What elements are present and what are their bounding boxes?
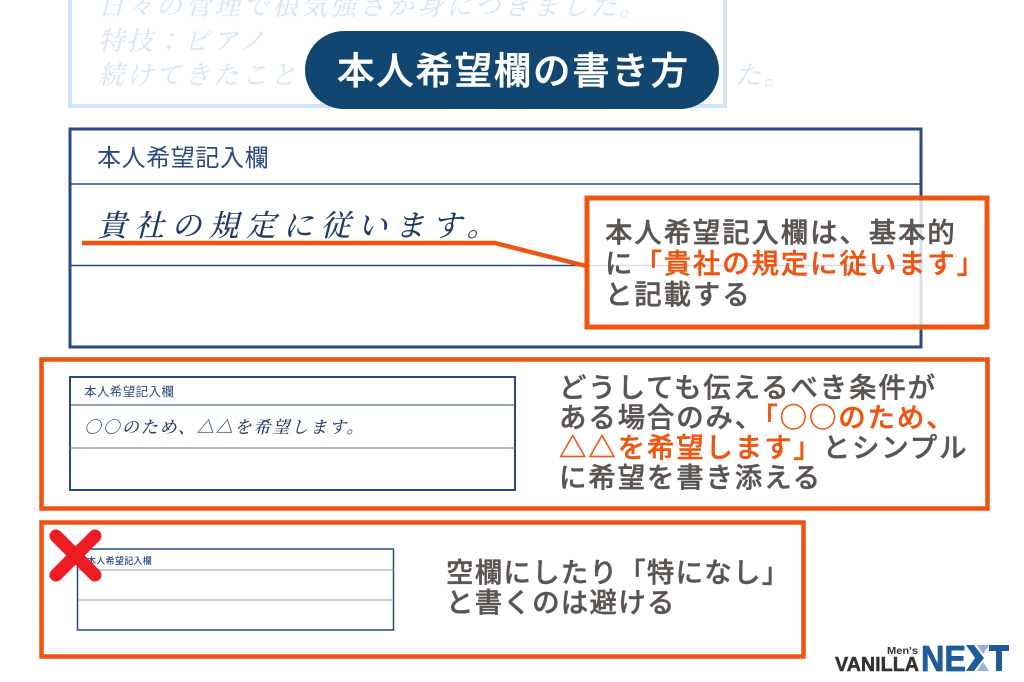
logo: VANILLA	[835, 654, 919, 676]
title	[305, 31, 719, 109]
text: conditional guidance: △△を希望します」とシンプル	[559, 425, 968, 465]
panel: conditional request	[42, 360, 988, 508]
callout: basic rule: 本人希望記入欄は、基本的	[605, 210, 957, 250]
logo: Men's	[887, 645, 918, 657]
text: conditional guidance: どうしても伝えるべき条件が	[559, 365, 937, 405]
faded background form: 特技：ピアノ	[98, 21, 267, 58]
panel: what to avoid	[42, 522, 804, 656]
text: conditional guidance: に希望を書き添える	[559, 455, 822, 495]
faded background form	[70, 0, 792, 106]
form: main example: 本人希望記入欄	[97, 145, 269, 172]
callout: basic rule: に「貴社の規定に従います」	[605, 241, 986, 281]
text: conditional guidance	[559, 365, 968, 495]
faded background form: た。	[735, 55, 792, 92]
form: main example: 貴社の規定に従います。	[97, 201, 504, 245]
form: main example	[70, 129, 921, 347]
text: conditional guidance: ある場合のみ、「○○のため、	[559, 395, 955, 435]
form: blank example: 本人希望記入欄	[87, 555, 152, 566]
title: 本人希望欄の書き方	[337, 50, 690, 92]
faded background form: 続けてきたこと	[98, 55, 299, 92]
form: blank example	[78, 549, 394, 630]
form: conditional example	[70, 377, 515, 490]
callout: basic rule: と記載する	[605, 272, 752, 312]
text: avoid guidance	[446, 550, 790, 620]
form: conditional example: 本人希望記入欄	[84, 384, 174, 399]
callout: basic rule	[587, 198, 987, 327]
callout leader line	[82, 243, 586, 266]
logo	[835, 638, 1009, 679]
text: avoid guidance: と書くのは避ける	[446, 580, 676, 620]
form: conditional example: ○○のため、△△を希望します。	[84, 413, 365, 438]
logo: NE	[921, 638, 966, 679]
icon: red cross	[56, 536, 95, 575]
text: avoid guidance: 空欄にしたり「特になし」	[446, 550, 790, 590]
